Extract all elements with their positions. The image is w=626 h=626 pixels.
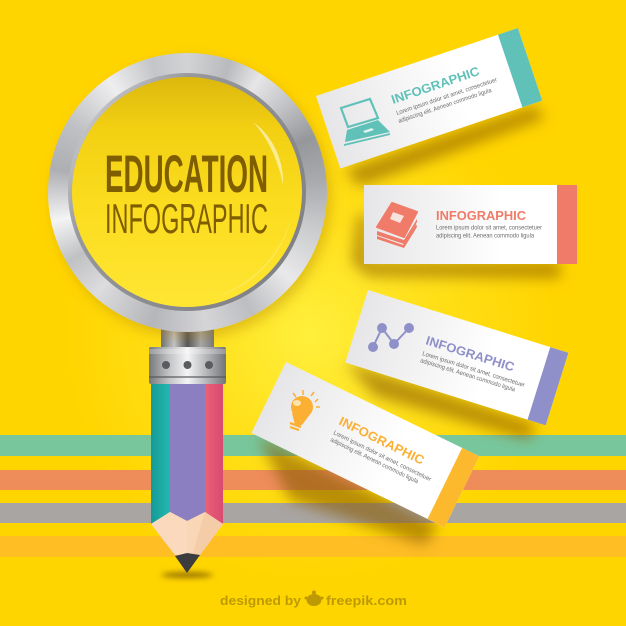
heading: INFOGRAPHIC <box>424 334 516 374</box>
metal neck <box>161 328 214 348</box>
pencil body stripes <box>151 384 223 524</box>
icon: laptop <box>341 99 390 145</box>
body text: Lorem ipsum dolor sit amet, consectetuer <box>395 76 498 117</box>
body text: adipiscing elit. Aenean commodo ligula <box>329 437 420 486</box>
heading: INFOGRAPHIC <box>436 209 526 223</box>
footer credit: freepik.com <box>326 593 407 608</box>
body text: Lorem ipsum dolor sit amet, consectetuer <box>332 430 432 483</box>
inner bevel <box>68 73 306 311</box>
card body <box>316 28 542 169</box>
ferrule <box>149 347 226 384</box>
card body <box>345 290 568 425</box>
title: infographic: INFOGRAPHIC <box>105 195 268 242</box>
card 4: light bulb <box>251 362 479 527</box>
title: education: EDUCATION <box>105 145 268 204</box>
body text: adipiscing elit. Aenean commodo ligula <box>397 87 493 125</box>
icon: network line <box>368 324 414 352</box>
coloured stripes <box>0 435 626 557</box>
graphite tip <box>175 553 200 573</box>
heading: INFOGRAPHIC <box>337 414 426 467</box>
card body <box>251 362 479 527</box>
lens highlight lower <box>215 215 292 297</box>
lens glass <box>72 77 302 307</box>
body text <box>436 224 542 240</box>
footer credit: designed by <box>220 593 302 608</box>
heading: INFOGRAPHIC <box>389 64 481 107</box>
icon: books <box>377 203 417 248</box>
body text: adipiscing elit. Aenean commodo ligula <box>436 232 535 240</box>
magnifier ring <box>48 53 327 332</box>
card shadows <box>258 106 560 545</box>
body text: adipiscing elit. Aenean commodo ligula <box>419 357 516 394</box>
card 1: laptop <box>316 28 542 169</box>
tip shadow <box>161 572 213 578</box>
icon: light bulb <box>290 390 320 430</box>
card body <box>364 185 577 264</box>
card 3: chart <box>345 290 568 425</box>
footer credit <box>220 590 407 608</box>
card 2: books <box>364 185 577 264</box>
wood cone <box>151 512 223 556</box>
body text: Lorem ipsum dolor sit amet, consectetuer <box>436 224 542 232</box>
icon: freepik mark <box>304 590 324 606</box>
body text: Lorem ipsum dolor sit amet, consectetuer <box>421 350 526 389</box>
lens highlight upper <box>253 122 283 184</box>
